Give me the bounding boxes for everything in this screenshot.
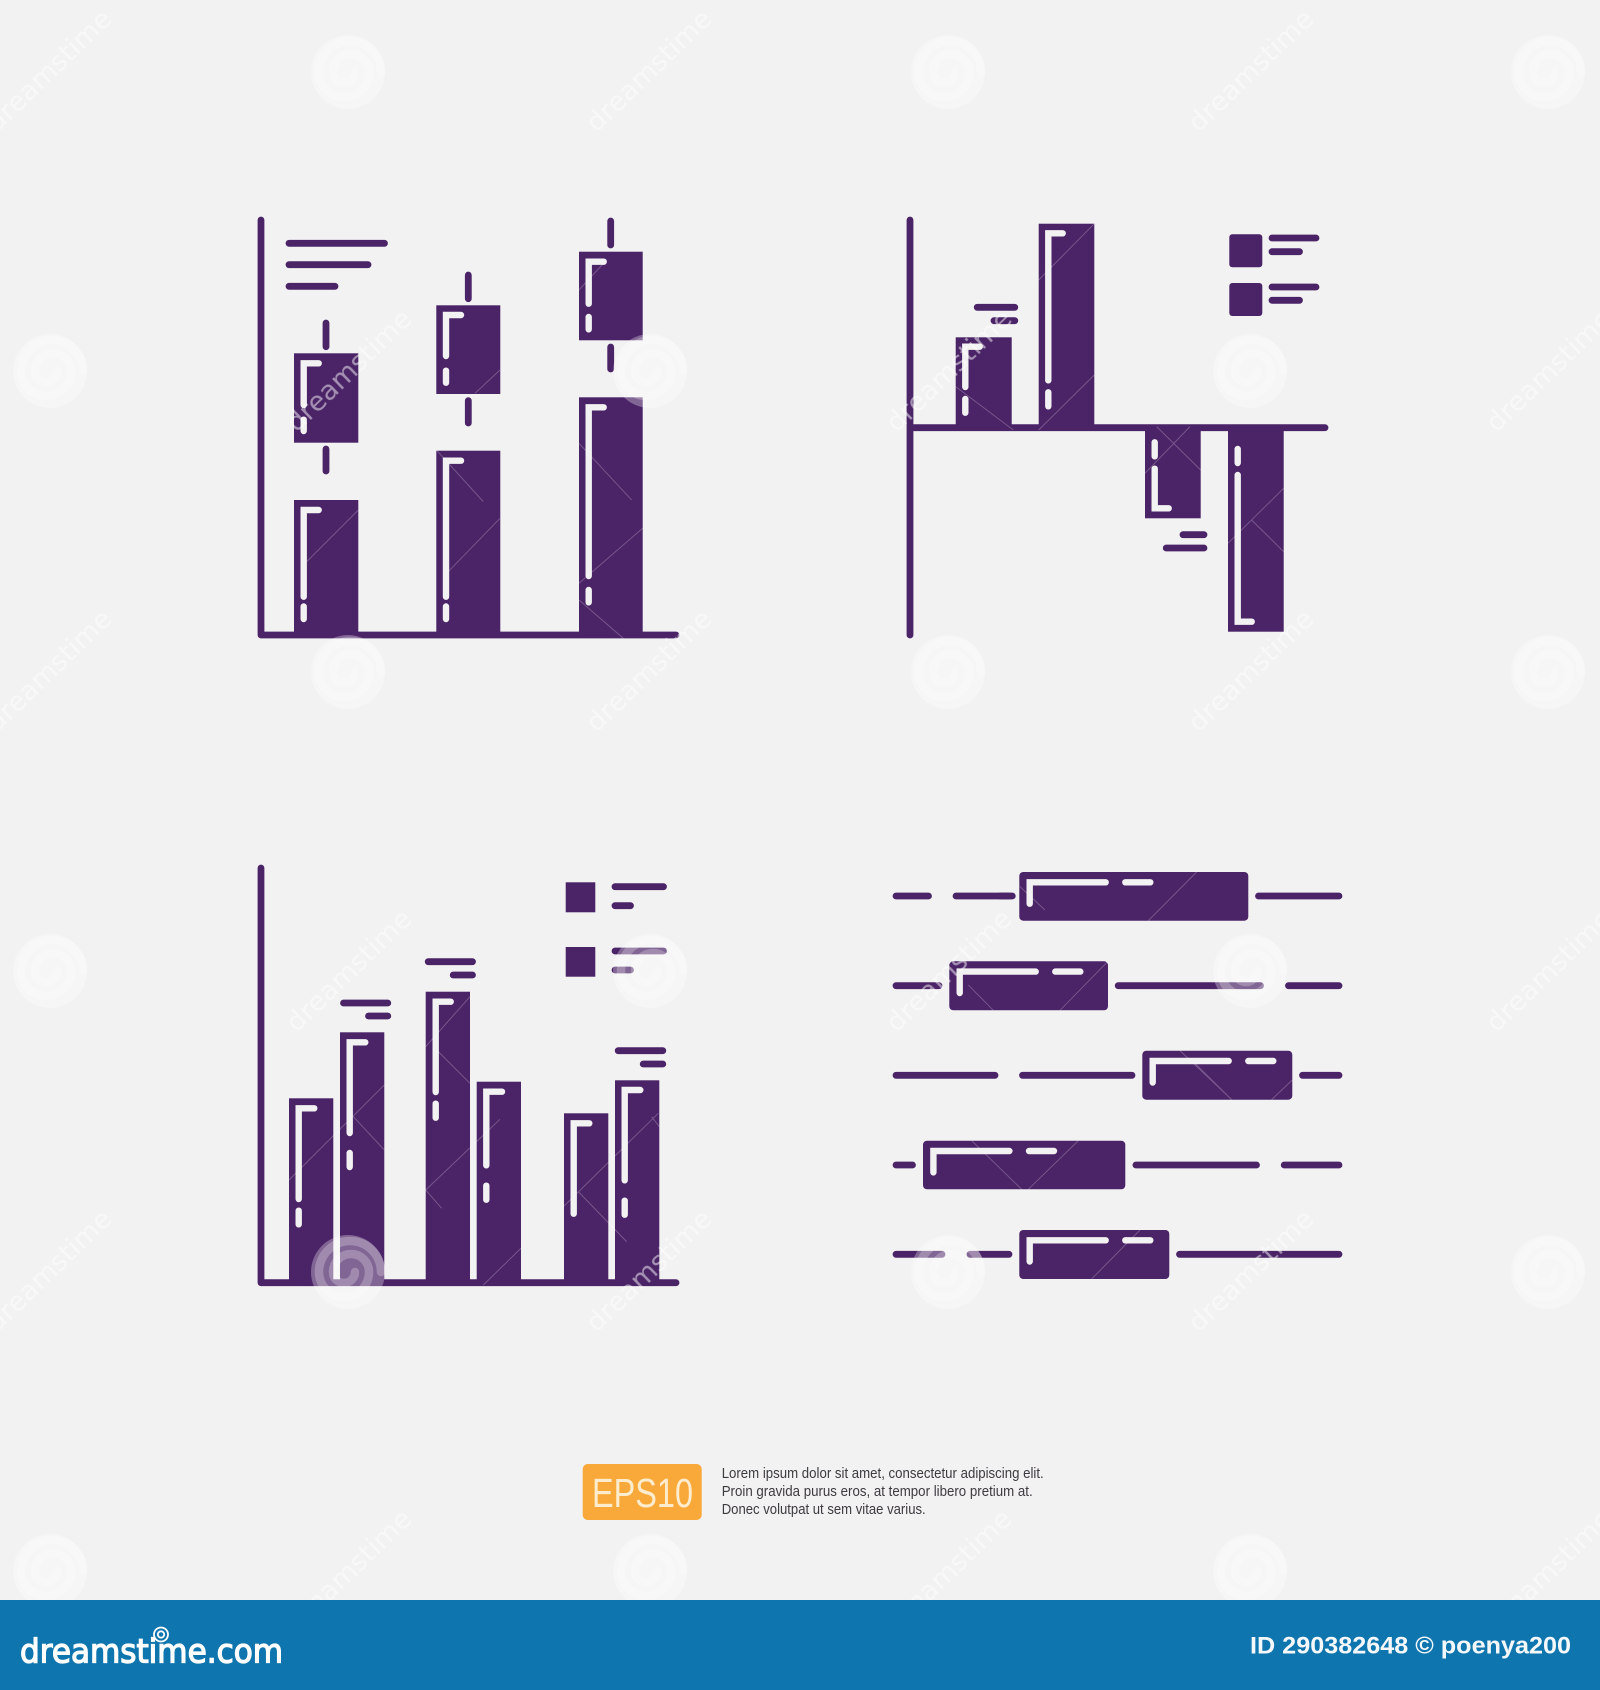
- description text: Lorem ipsum dolor sit amet, consectetur adipiscing elit.: [722, 1466, 1044, 1482]
- icon: logo swirl: [154, 1628, 168, 1642]
- axes: [261, 220, 676, 635]
- watermark text: dreamstime: [880, 1503, 1018, 1638]
- watermark text: dreamstime: [880, 303, 1018, 438]
- watermark text: dreamstime: [580, 1203, 718, 1338]
- watermark text: dreamstime: [1182, 3, 1320, 138]
- bar group 1: [294, 323, 358, 635]
- bars: [289, 992, 659, 1283]
- footer banner: [0, 1600, 1600, 1690]
- bar highlights: [299, 1002, 640, 1224]
- description text: Proin gravida purus eros, at tempor libero pretium at.: [722, 1484, 1033, 1500]
- description text: Donec volutpat ut sem vitae varius.: [722, 1502, 926, 1518]
- bar 1: [956, 307, 1015, 427]
- watermark text: dreamstime: [580, 3, 718, 138]
- bar 3: [1145, 428, 1204, 548]
- chart: stacked bars with floating candles: [261, 220, 676, 636]
- legend text lines: [289, 243, 384, 286]
- chart: horizontal range bars: [896, 872, 1339, 1279]
- watermark text: dreamstime: [1182, 1203, 1320, 1338]
- watermark text: dreamstime: [580, 603, 718, 738]
- chart: positive and negative bars: [910, 220, 1325, 635]
- description text: [722, 1466, 1044, 1518]
- bar group 2: [436, 275, 500, 636]
- watermark text: dreamstime: [880, 903, 1018, 1038]
- EPS10 badge: [583, 1464, 702, 1520]
- bar labels: [344, 962, 663, 1064]
- bar group 3: [579, 221, 643, 635]
- row 2: [896, 961, 1339, 1010]
- row 5: [896, 1230, 1339, 1279]
- row 3: [896, 1051, 1339, 1100]
- bar 2: [1039, 224, 1094, 428]
- row 4: [896, 1141, 1339, 1189]
- watermark hairlines: [289, 224, 1292, 1285]
- bar 4: [1228, 428, 1284, 632]
- axes: [910, 220, 1325, 635]
- brand name: dreamstime.com: [20, 1632, 283, 1670]
- row 1: [896, 872, 1339, 921]
- watermark text: dreamstime: [280, 303, 418, 438]
- watermark text: dreamstime: [1182, 603, 1320, 738]
- legend: [566, 882, 664, 977]
- image id and author: ID 290382648 © poenya200: [1250, 1632, 1571, 1660]
- watermark text: dreamstime: [280, 903, 418, 1038]
- chart: grouped bars: [261, 868, 676, 1283]
- axes: [261, 868, 676, 1283]
- EPS10 badge: EPS10: [592, 1470, 693, 1516]
- watermark text: dreamstime: [280, 1503, 418, 1638]
- legend: [1229, 234, 1316, 316]
